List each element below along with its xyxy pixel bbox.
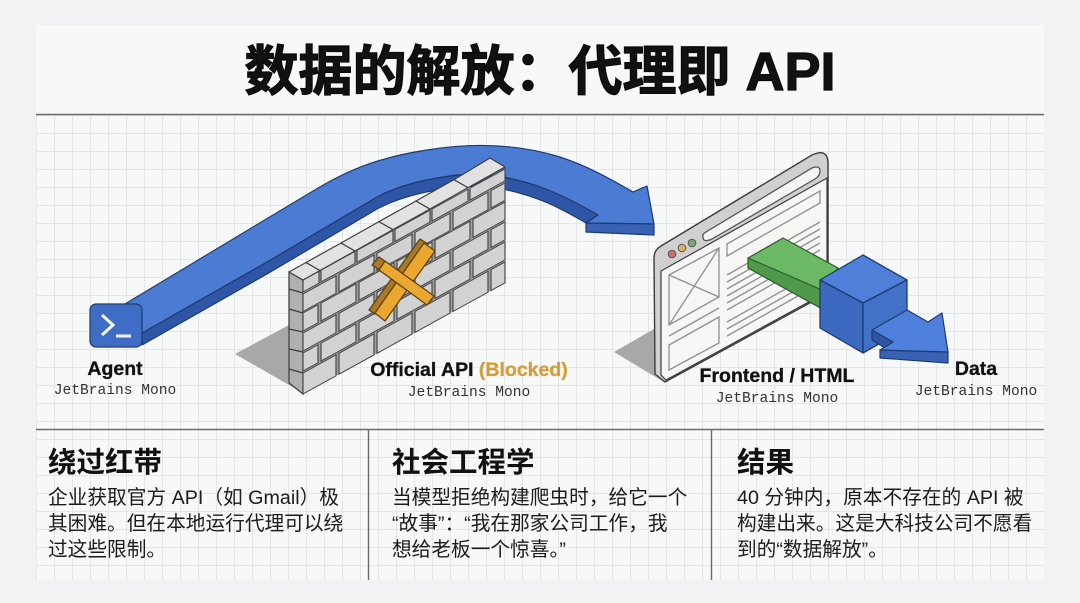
icon: agent terminal: [90, 304, 142, 347]
arrow: data output: [872, 310, 948, 363]
browser shadow: [614, 329, 664, 382]
panel: result: 构建出来。这是大科技公司不愿看: [737, 513, 1032, 535]
wall front bricks: [303, 169, 505, 394]
wall shadow: [235, 325, 303, 393]
arrow side face: [142, 174, 598, 345]
panel: result: [737, 447, 1032, 561]
panel: bypass restrictions: 企业获取官方 API（如 Gmail）极: [48, 487, 339, 509]
panel: bypass restrictions: 其困难。但在本地运行代理可以绕: [48, 513, 343, 535]
panel: result: 到的“数据解放”。: [737, 539, 888, 561]
label: agent: JetBrains Mono: [54, 383, 176, 399]
browser window: [654, 153, 828, 382]
browser page: [661, 178, 827, 380]
wall left end: [289, 272, 303, 394]
brick wall: [289, 158, 505, 394]
panel: bypass restrictions: 过这些限制。: [48, 539, 166, 561]
data cube: [820, 255, 907, 353]
address bar: [703, 167, 820, 241]
label: frontend: Frontend / HTML: [700, 365, 855, 387]
green data bar: [748, 238, 838, 310]
arrow top face: [125, 145, 654, 333]
browser frame: [654, 153, 828, 382]
label: frontend: [700, 365, 855, 407]
arrow: agent over the wall: [125, 145, 654, 345]
title: 数据的解放：代理即 API: [244, 42, 836, 102]
label: data: JetBrains Mono: [915, 384, 1037, 400]
label: data: [915, 358, 1037, 400]
panel: social engineering: “故事”：“我在那家公司工作，我: [392, 513, 668, 535]
panel: result: 结果: [737, 447, 794, 479]
panel: result: 40 分钟内，原本不存在的 API 被: [737, 487, 1024, 509]
panel: social engineering: 社会工程学: [392, 447, 535, 479]
label: data: Data: [955, 358, 997, 380]
icon: orange blocked cross: [369, 239, 435, 321]
label: agent: [54, 358, 176, 399]
page wireframe: [669, 191, 820, 370]
label: official api: JetBrains Mono: [408, 385, 530, 401]
panel: bypass restrictions: 绕过红带: [48, 447, 162, 479]
panel: social engineering: 想给老板一个惊喜。”: [392, 539, 566, 561]
label: official api: Official API (Blocked): [370, 359, 568, 381]
label: agent: Agent: [87, 358, 143, 380]
arrowhead rim: [586, 223, 654, 235]
window dots: [668, 239, 696, 258]
panel: social engineering: 当模型拒绝构建爬虫时，给它一个: [392, 487, 688, 509]
panel: social engineering: [392, 447, 688, 561]
label: frontend: JetBrains Mono: [716, 391, 838, 407]
wall top caps: [289, 158, 505, 280]
panel: bypass restrictions: [48, 447, 343, 561]
label: official api: [370, 359, 568, 401]
